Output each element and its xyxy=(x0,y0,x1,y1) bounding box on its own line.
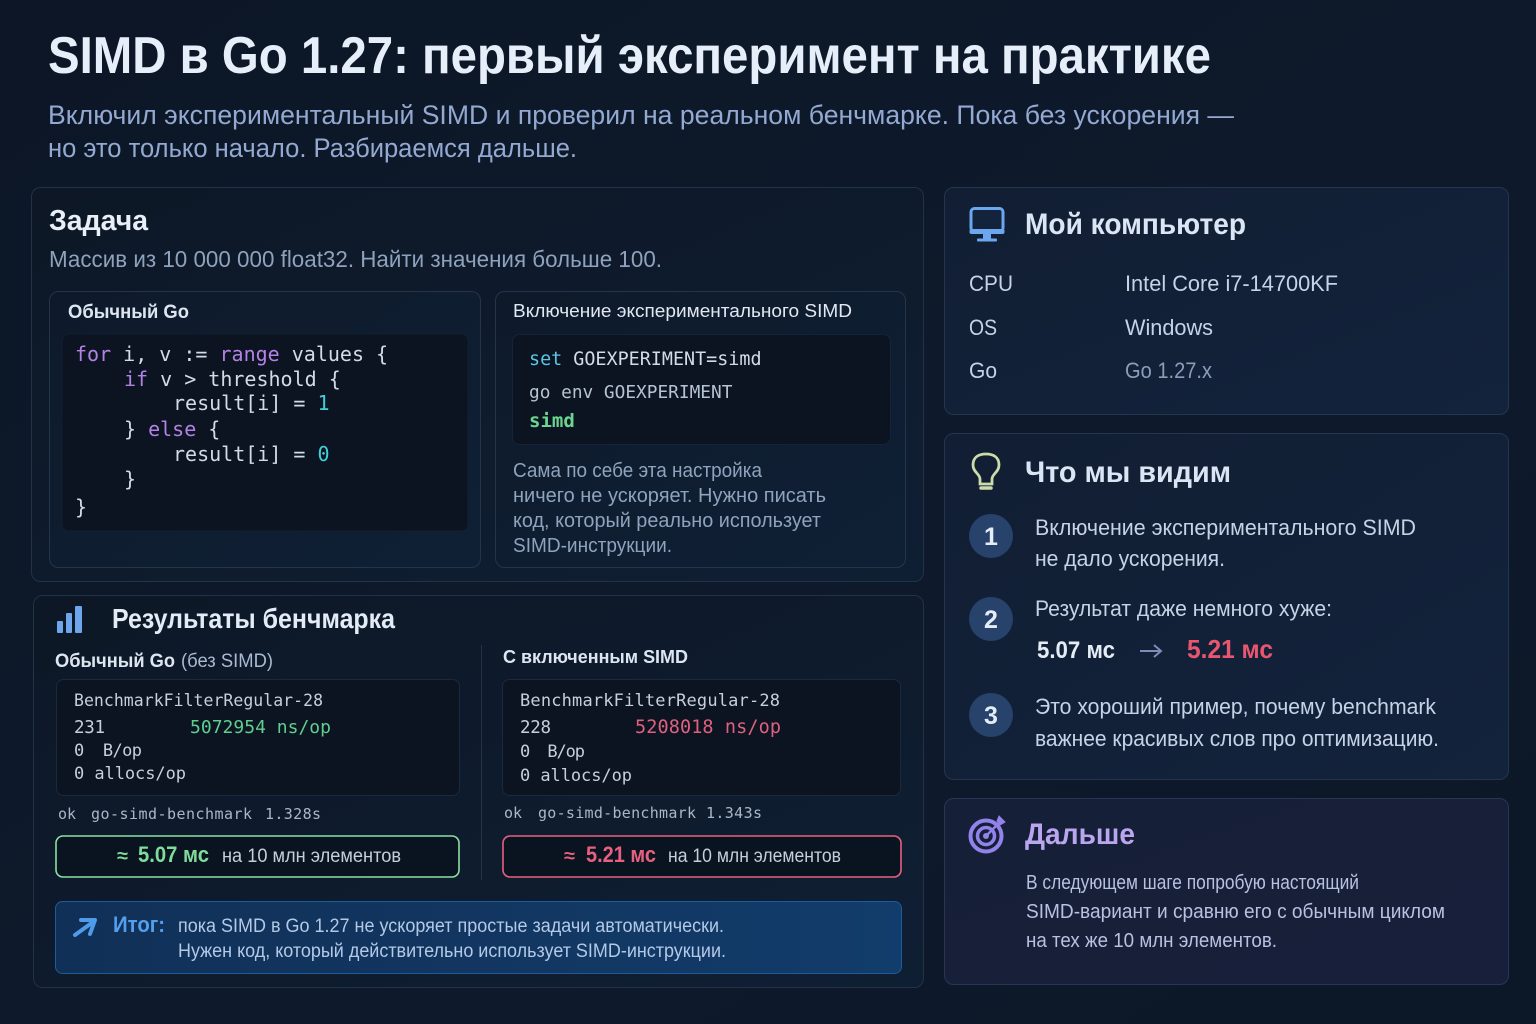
code block: SIMD result: 0 allocs/op xyxy=(520,766,632,786)
code block: SIMD result xyxy=(502,680,900,796)
point 3: 3 xyxy=(984,702,998,730)
next heading: Дальше xyxy=(1025,818,1135,851)
result pill: regular: на 10 млн элементов xyxy=(222,846,401,867)
column heading: regular: Обычный Go xyxy=(55,651,175,672)
run summary: SIMD: ok xyxy=(504,804,522,822)
code block: regular result: 0 B/op xyxy=(74,741,142,761)
column heading: SIMD: С включенным SIMD xyxy=(503,646,688,667)
result pill: SIMD xyxy=(503,836,901,877)
run summary: regular xyxy=(58,805,321,823)
subtitle xyxy=(48,100,1234,163)
result pill: SIMD: 5.21 мс xyxy=(586,842,656,867)
icon: monitor xyxy=(970,208,1004,242)
card: regular Go xyxy=(50,292,480,568)
icon: light bulb xyxy=(973,454,999,488)
run summary: regular: ok xyxy=(58,805,76,823)
code block: loop: for i, v := range values { xyxy=(75,342,388,366)
arrow xyxy=(1140,645,1161,657)
column divider xyxy=(481,645,482,880)
code block: env: go env GOEXPERIMENT xyxy=(529,382,733,403)
spec table: Go 1.27.x xyxy=(1125,358,1212,383)
icon: target xyxy=(970,816,1005,852)
callout: conclusion xyxy=(56,902,902,974)
code block: loop: } else { xyxy=(124,417,220,441)
spec table: Intel Core i7-14700KF xyxy=(1125,271,1338,296)
point 2: 5.07 мс xyxy=(1037,637,1115,664)
card: enabling SIMD xyxy=(496,292,906,568)
title: SIMD в Go 1.27: первый эксперимент на практике xyxy=(48,27,1211,85)
spec table: CPU xyxy=(969,271,1013,296)
next text: SIMD-вариант и сравню его с обычным циклом xyxy=(1026,901,1445,923)
spec table xyxy=(969,271,1338,383)
next text: на тех же 10 млн элементов. xyxy=(1026,930,1277,952)
panel: benchmark results xyxy=(34,596,924,988)
point 3 xyxy=(969,693,1439,751)
point 2: Результат даже немного хуже: xyxy=(1035,596,1332,621)
code block: regular result xyxy=(56,680,460,796)
point 2 xyxy=(969,596,1332,664)
code block: env: simd xyxy=(529,410,575,432)
results heading: Результаты бенчмарка xyxy=(112,603,395,634)
code block: loop: } xyxy=(75,495,87,519)
result pill: SIMD: на 10 млн элементов xyxy=(668,846,841,867)
result pill: regular: ≈ xyxy=(117,846,129,867)
code block: env xyxy=(512,334,890,444)
result pill: SIMD: ≈ xyxy=(564,846,576,867)
panel: next xyxy=(944,798,1508,984)
run summary: SIMD: go-simd-benchmark xyxy=(538,804,696,822)
code block: loop: if v > threshold { xyxy=(124,367,341,391)
card note xyxy=(513,460,826,557)
card note: код, который реально использует xyxy=(513,510,821,532)
code block: regular result: BenchmarkFilterRegular-28 xyxy=(74,691,323,710)
spec table: OS xyxy=(969,315,997,340)
next text: В следующем шаге попробую настоящий xyxy=(1026,872,1359,894)
point 1: 1 xyxy=(984,523,998,551)
conclusion text: Нужен код, который действительно использует SIMD-инструкции. xyxy=(178,941,726,962)
code block: loop xyxy=(62,334,468,531)
point 1: Включение экспериментального SIMD xyxy=(1035,515,1416,540)
subtitle: но это только начало. Разбираемся дальше. xyxy=(48,133,577,163)
next text xyxy=(1026,872,1445,952)
result pill: regular: 5.07 мс xyxy=(138,842,209,867)
panel: my computer xyxy=(944,188,1508,414)
card note: ничего не ускоряет. Нужно писать xyxy=(513,485,826,507)
code block: regular result: 231 xyxy=(74,718,105,738)
conclusion label: Итог: xyxy=(113,912,165,937)
computer heading: Мой компьютер xyxy=(1025,208,1246,241)
card heading: Включение экспериментального SIMD xyxy=(513,300,852,321)
point 3: Это хороший пример, почему benchmark xyxy=(1035,694,1437,719)
code block: regular result: 5072954 ns/op xyxy=(190,717,331,738)
conclusion text: пока SIMD в Go 1.27 не ускоряет простые задачи автоматически. xyxy=(178,916,724,937)
run summary: regular: go-simd-benchmark xyxy=(91,805,252,823)
code block: SIMD result: 0 B/op xyxy=(520,742,585,762)
conclusion text xyxy=(178,916,726,962)
code block: SIMD result: BenchmarkFilterRegular-28 xyxy=(520,691,780,711)
point 1 xyxy=(969,514,1416,571)
run summary: SIMD xyxy=(504,804,762,822)
spec table: Go xyxy=(969,358,997,383)
card note: Сама по себе эта настройка xyxy=(513,460,763,482)
run summary: SIMD: 1.343s xyxy=(706,804,762,822)
point 1: не дало ускорения. xyxy=(1035,546,1225,571)
code block: SIMD result: 228 xyxy=(520,718,551,738)
panel: what we see xyxy=(944,434,1508,780)
code block: regular result: 0 allocs/op xyxy=(74,764,186,784)
card heading: Обычный Go xyxy=(68,302,189,323)
code block: env: set GOEXPERIMENT=simd xyxy=(529,349,762,370)
panel: task xyxy=(32,188,924,582)
point 2: 2 xyxy=(984,606,998,634)
code block: loop: result[i] = 0 xyxy=(173,442,330,466)
code block: SIMD result: 5208018 ns/op xyxy=(635,717,781,738)
task description: Массив из 10 000 000 float32. Найти значения больше 100. xyxy=(49,246,662,272)
point 2: 5.21 мс xyxy=(1187,634,1273,664)
column heading: regular xyxy=(55,651,273,672)
icon: bar chart xyxy=(57,606,82,633)
run summary: regular: 1.328s xyxy=(265,805,321,823)
code block: loop: } xyxy=(124,467,136,491)
heading: Что мы видим xyxy=(1025,456,1231,489)
card note: SIMD-инструкции. xyxy=(513,535,672,557)
task heading: Задача xyxy=(49,205,149,237)
result pill: regular xyxy=(56,836,459,877)
subtitle: Включил экспериментальный SIMD и проверил на реальном бенчмарке. Пока без ускорения — xyxy=(48,100,1234,130)
icon: arrow xyxy=(75,920,95,935)
code block: loop: result[i] = 1 xyxy=(173,391,330,415)
spec table: Windows xyxy=(1125,315,1213,340)
point 3: важнее красивых слов про оптимизацию. xyxy=(1035,726,1439,751)
column heading: regular: (без SIMD) xyxy=(181,651,273,672)
